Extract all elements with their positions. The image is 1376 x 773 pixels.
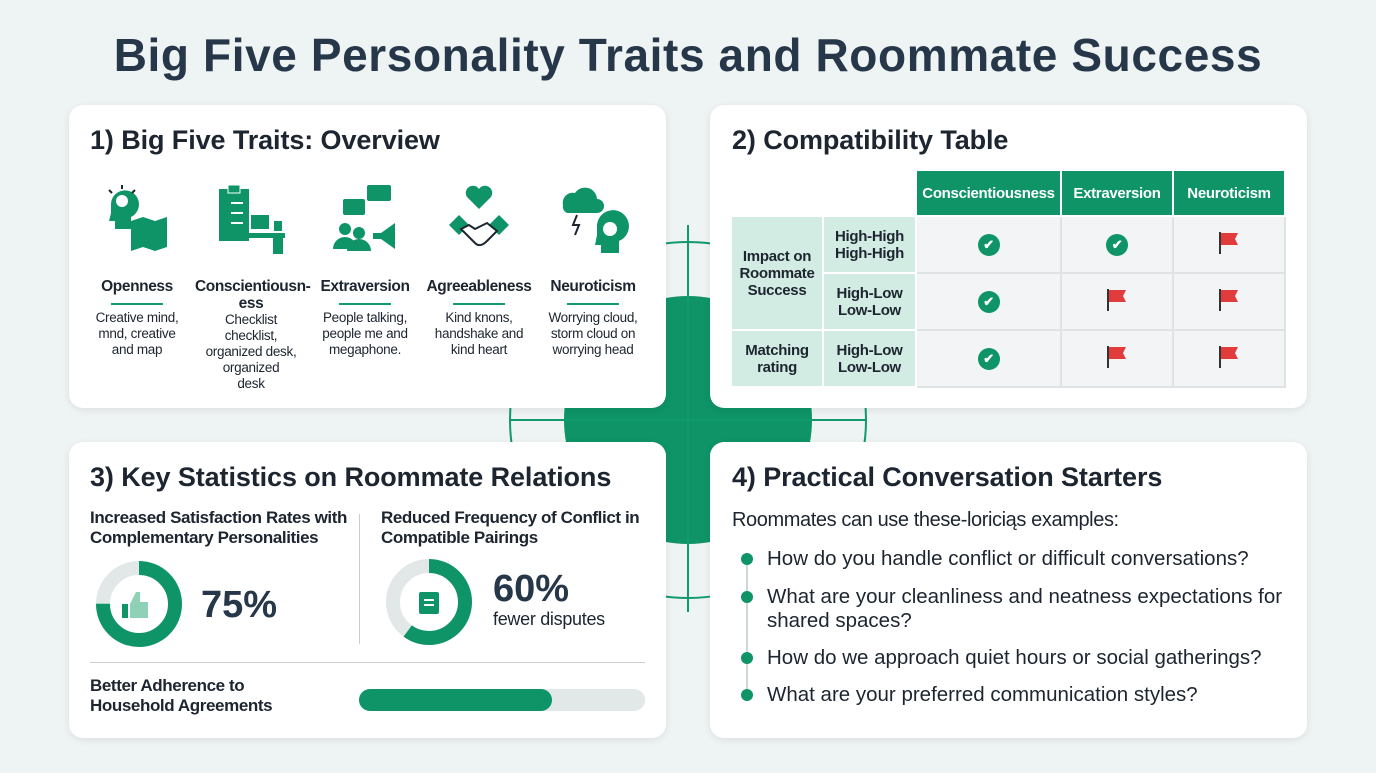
trait: neuroticism: worrying head xyxy=(553,342,633,357)
stat: adherence bar xyxy=(90,676,645,715)
bullet list: What are your cleanliness and neatness expectations for xyxy=(767,585,1282,608)
trait: openness: and map xyxy=(112,342,162,357)
panel: compatibility table xyxy=(710,105,1307,408)
trait: conscientiousness xyxy=(195,186,310,391)
panel: big five overview xyxy=(69,105,666,408)
bullet list: What are your preferred communication styles? xyxy=(767,683,1198,706)
trait: conscientiousness: desk xyxy=(237,376,265,391)
table: Conscientiousness xyxy=(922,184,1055,202)
trait: neuroticism: Neuroticism xyxy=(550,278,636,295)
title: Big Five Personality Traits and Roommate Success xyxy=(114,29,1262,81)
table: rating xyxy=(757,358,797,376)
trait: conscientiousness: organized desk, xyxy=(206,344,296,359)
heading: 4) Practical Conversation Starters xyxy=(732,462,1162,492)
bullet list xyxy=(741,547,1282,706)
donut 75% xyxy=(96,561,182,647)
stat: satisfaction: Complementary Personalities xyxy=(90,528,318,547)
panel: key statistics xyxy=(69,442,666,738)
trait: agreeableness: Agreeableness xyxy=(426,278,532,295)
trait: conscientiousness: Checklist xyxy=(225,312,277,327)
trait: conscientiousness: checklist, xyxy=(225,328,277,343)
stat: conflict: 60% xyxy=(493,568,569,610)
table: ✔ xyxy=(983,350,994,366)
panel: conversation starters xyxy=(710,442,1307,738)
table: High-High xyxy=(835,244,904,262)
trait: openness xyxy=(96,185,178,357)
stat: satisfaction: Increased Satisfaction Rates with xyxy=(90,508,347,527)
table: ✔ xyxy=(1112,236,1122,252)
intro text: Roommates can use these-loriciąs examples: xyxy=(732,509,1119,531)
trait: extraversion: People talking, xyxy=(323,310,407,325)
heading: 2) Compatibility Table xyxy=(732,125,1008,155)
table: High-Low xyxy=(837,342,902,358)
divider xyxy=(90,662,645,663)
stat: conflict: Reduced Frequency of Conflict in xyxy=(381,508,639,527)
stat: satisfaction: 75% xyxy=(201,584,277,626)
table: ✔ xyxy=(983,294,994,308)
stat: conflict: Compatible Pairings xyxy=(381,528,538,547)
table: ✔ xyxy=(983,236,994,252)
trait: agreeableness xyxy=(426,186,532,357)
trait: conscientiousness: organized xyxy=(223,360,279,375)
table: Neuroticism xyxy=(1187,184,1271,202)
bullet list: shared spaces? xyxy=(767,609,912,632)
trait: agreeableness: kind heart xyxy=(451,342,507,357)
trait: extraversion: Extraversion xyxy=(320,278,410,295)
traits row xyxy=(96,185,638,391)
bullet list: How do you handle conflict or difficult conversations? xyxy=(767,547,1249,570)
table xyxy=(732,171,1286,388)
trait: conscientiousness: Conscientiousn- xyxy=(195,278,310,295)
stat: conflict xyxy=(381,508,639,645)
trait: extraversion: people me and xyxy=(322,326,408,341)
table: Impact on xyxy=(743,248,811,264)
trait: neuroticism xyxy=(548,188,638,357)
trait: extraversion: megaphone. xyxy=(329,342,401,357)
stat: adherence bar: Household Agreements xyxy=(90,696,272,715)
table: High-High xyxy=(835,228,904,244)
trait: neuroticism: Worrying cloud, xyxy=(548,310,638,325)
trait: openness: mnd, creative xyxy=(98,326,176,341)
table: Success xyxy=(748,282,806,298)
trait: neuroticism: storm cloud on xyxy=(551,326,635,341)
trait: extraversion xyxy=(320,185,410,357)
stat: adherence bar: Better Adherence to xyxy=(90,676,244,695)
bullet list: How do we approach quiet hours or social gatherings? xyxy=(767,646,1262,669)
heading: 3) Key Statistics on Roommate Relations xyxy=(90,462,611,492)
trait: agreeableness: handshake and xyxy=(435,326,523,341)
trait: openness: Openness xyxy=(101,278,173,295)
table: Roommate xyxy=(739,264,815,282)
table: High-Low xyxy=(837,284,902,302)
table: Matching xyxy=(745,342,809,358)
stat: conflict: fewer disputes xyxy=(493,609,605,629)
table: Low-Low xyxy=(838,302,901,318)
table: Low-Low xyxy=(838,358,901,376)
table: Extraversion xyxy=(1073,184,1161,202)
trait: conscientiousness: ess xyxy=(239,295,263,312)
donut 60% xyxy=(386,559,472,645)
trait: agreeableness: Kind knons, xyxy=(445,310,513,325)
trait: openness: Creative mind, xyxy=(96,310,178,325)
stat: satisfaction xyxy=(90,508,347,647)
divider xyxy=(359,514,360,644)
heading: 1) Big Five Traits: Overview xyxy=(90,125,440,155)
